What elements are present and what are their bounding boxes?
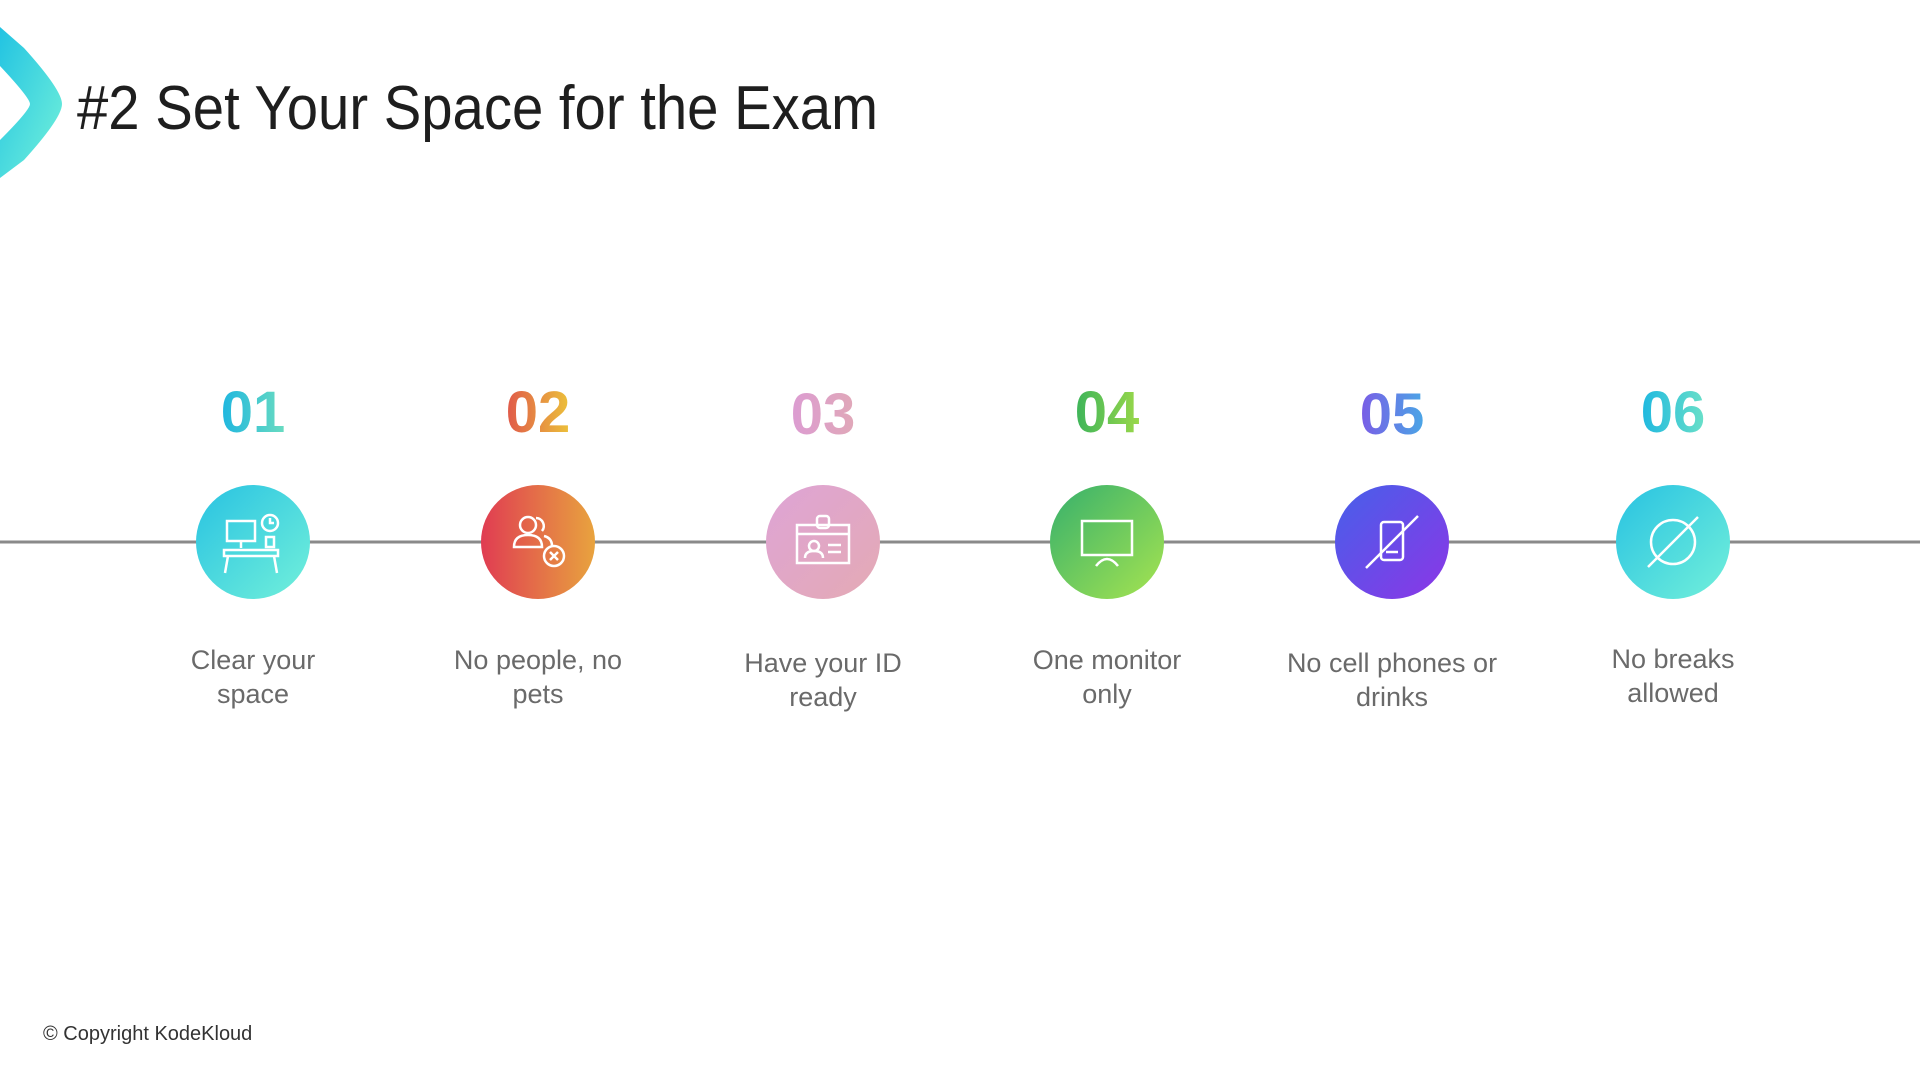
label 04 [1033,645,1181,709]
step 01: 01 [221,380,285,445]
label 06: allowed [1627,678,1719,708]
label 03 [744,648,902,712]
step 03: 03 [791,382,855,447]
step 06: 06 [1641,380,1705,445]
step 04 [1050,380,1164,599]
step 01 [196,380,310,599]
step 04: 04 [1075,380,1139,445]
label 05 [1287,648,1497,712]
chevron logo [0,27,62,178]
label 01 [191,645,315,709]
title: #2 Set Your Space for the Exam [77,74,878,143]
step 02: 02 [506,380,570,445]
label 06: No breaks [1611,644,1735,674]
label 02: No people, no [454,645,622,675]
label 05: No cell phones or [1287,648,1497,678]
label 03: ready [789,682,857,712]
step 03 [766,382,880,599]
label 05: drinks [1356,682,1428,712]
step 02 [481,380,595,599]
label 02: pets [512,679,564,709]
label 03: Have your ID [744,648,902,678]
step 05: 05 [1360,382,1424,447]
label 04: only [1082,679,1132,709]
step 06 [1616,380,1730,599]
label 06 [1611,644,1735,708]
copyright: © Copyright KodeKloud [43,1023,252,1045]
step 05 [1335,382,1449,599]
label 02 [454,645,622,709]
label 01: Clear your [191,645,315,675]
label 01: space [217,679,289,709]
label 04: One monitor [1033,645,1181,675]
timeline line [0,540,1920,544]
